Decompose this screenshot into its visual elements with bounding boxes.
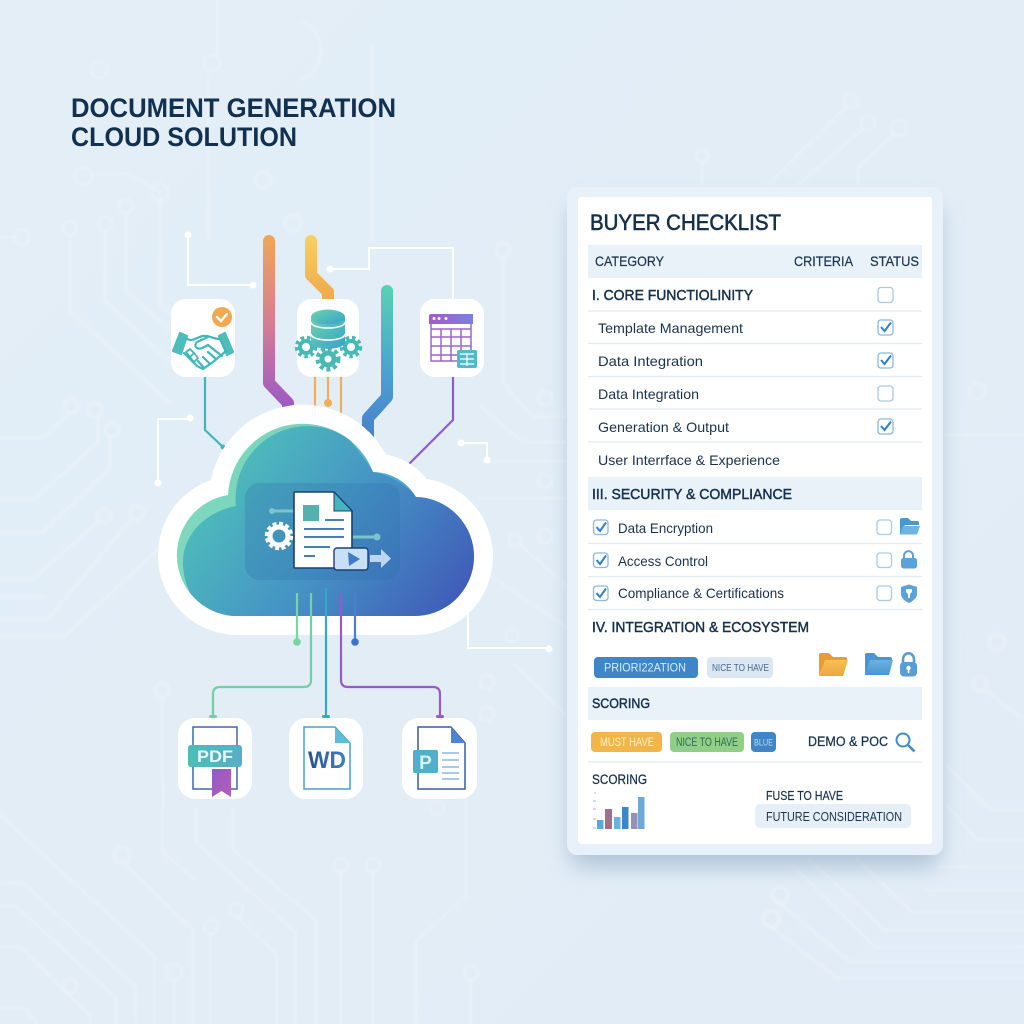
scoring band: SCORING [592, 695, 650, 711]
coloured data pipes [205, 241, 453, 463]
pill: must have: MUST HAVE [600, 737, 654, 749]
table header: STATUS [870, 253, 919, 269]
section I: I. CORE FUNCTIOLINITY [592, 288, 753, 304]
section IV: IV. INTEGRATION & ECOSYSTEM [592, 620, 809, 636]
icon card: database [296, 299, 360, 377]
row: access control: Access Control [618, 553, 708, 569]
table grid [429, 314, 473, 361]
heading: buyer checklist: BUYER CHECKLIST [590, 210, 781, 235]
row dividers [588, 311, 922, 762]
row: generation and output: Generation & Output [598, 419, 729, 435]
pill: nice to have green [670, 732, 744, 752]
pill: blue [751, 732, 776, 752]
section III band: III. SECURITY & COMPLIANCE [592, 487, 792, 503]
pill: nice to have [707, 657, 773, 678]
pill: prioritization: PRIORI22ATION [604, 662, 686, 674]
scoring band [588, 687, 922, 720]
row: data encryption [594, 518, 920, 536]
table header: CRITERIA [794, 253, 854, 269]
table header [588, 245, 922, 278]
pill: blue: BLUE [754, 738, 773, 748]
title: CLOUD SOLUTION [71, 122, 297, 152]
row: generation and output [598, 419, 893, 435]
icon: blue folder [865, 653, 893, 675]
demo and poc: DEMO & POC [808, 734, 888, 749]
icon card: handshake [171, 299, 235, 377]
file card: WD [289, 718, 363, 799]
file card: PDF [178, 718, 252, 799]
connector dots [269, 508, 380, 540]
future consideration box [755, 804, 911, 828]
panel: buyer checklist [567, 187, 943, 855]
scoring label: SCORING [592, 772, 647, 787]
cloud [177, 424, 480, 625]
row: data integration: Data Integration [598, 353, 703, 369]
table header: CATEGORY [595, 253, 665, 269]
panel shadow [570, 205, 940, 867]
row: access control [594, 551, 917, 569]
fuse to have: FUSE TO HAVE [766, 789, 843, 803]
section I [592, 288, 893, 304]
pill: nice to have green: NICE TO HAVE [676, 737, 738, 749]
row: data integration [598, 353, 893, 369]
database cylinder [311, 310, 345, 349]
output connectors [209, 588, 444, 718]
file card: P [402, 718, 477, 799]
bookmark [212, 769, 231, 797]
title: DOCUMENT GENERATION [71, 93, 396, 123]
pill: nice to have: NICE TO HAVE [712, 663, 769, 674]
gears [296, 338, 360, 370]
document icon [294, 492, 352, 568]
arrow [370, 549, 391, 568]
row: compliance: Compliance & Certifications [618, 585, 784, 601]
row: data encryption: Data Encryption [618, 520, 713, 536]
row: user interface: User Interrface & Experience [598, 452, 780, 468]
row: compliance [594, 584, 917, 603]
title [71, 93, 396, 152]
pill: must have [591, 732, 662, 752]
icon card: calendar table [420, 299, 484, 377]
file card: PDF: PDF [197, 747, 233, 766]
file card: WD: WD [308, 747, 346, 774]
future consideration box: FUTURE CONSIDERATION [766, 810, 902, 824]
gear icon [266, 524, 292, 548]
section III band [588, 477, 922, 510]
white circuit connectors [154, 232, 552, 652]
handshake icon [173, 333, 233, 369]
row: data integration 2 [598, 386, 893, 402]
check badge [212, 307, 232, 327]
file card: P: P [419, 753, 432, 774]
icon: magnifier [896, 734, 914, 752]
icon: padlock [900, 653, 917, 676]
row: template management [598, 320, 893, 336]
pill: prioritization [594, 657, 698, 678]
play card [334, 548, 368, 570]
row: template management: Template Management [598, 320, 743, 336]
mini sheet [457, 350, 477, 368]
bar chart [593, 793, 644, 829]
row: data integration 2: Data Integration [598, 386, 699, 402]
icon: orange folder [819, 653, 848, 676]
inner panel [245, 483, 400, 580]
